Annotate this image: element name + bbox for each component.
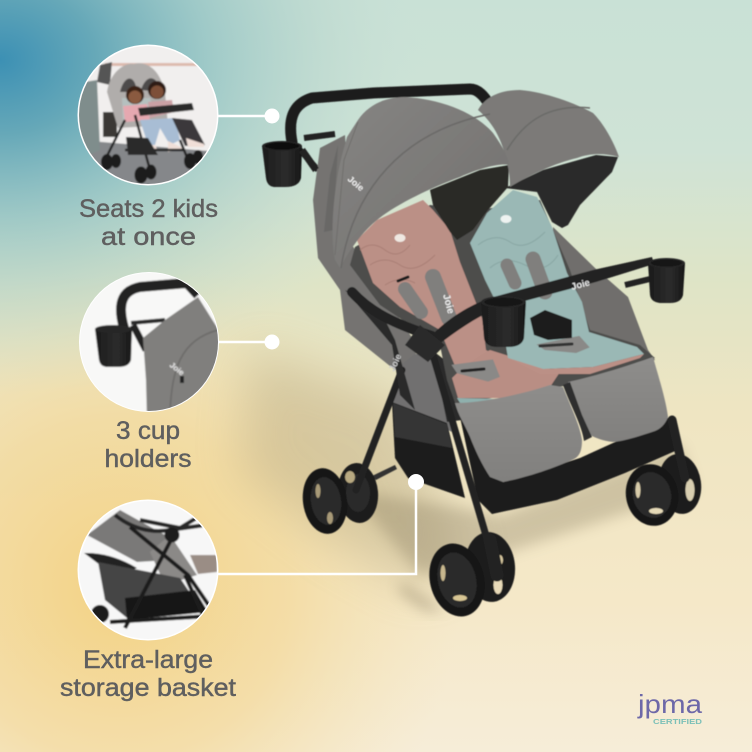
buckle <box>530 310 572 340</box>
label: 3 cup holders: holders <box>104 445 192 473</box>
frame legs <box>356 352 685 575</box>
inset: cup holder <box>78 272 225 420</box>
stroller <box>262 89 705 622</box>
inset: storage basket <box>78 499 220 641</box>
left cup holder <box>262 141 316 187</box>
push handle <box>291 89 489 142</box>
label: seats 2 kids at once: Seats 2 kids <box>79 195 218 223</box>
footrest platform <box>460 417 682 514</box>
front wheels <box>299 459 684 622</box>
foot covers <box>455 357 668 482</box>
jpma certified logo: jpma <box>637 689 703 719</box>
connector: basket <box>218 474 424 574</box>
connector: seats <box>218 108 280 124</box>
teal seat liner <box>470 190 644 374</box>
right seat side <box>550 227 655 372</box>
label: seats 2 kids at once: at once <box>101 223 196 251</box>
left body side panel <box>313 135 420 370</box>
right canopy <box>478 90 619 187</box>
floor shadow <box>240 350 695 612</box>
inset: cup holder: Joie <box>168 360 186 378</box>
seat logos <box>394 215 512 242</box>
label: 3 cup holders <box>104 417 192 473</box>
inset: seats two kids <box>78 44 220 190</box>
front cup holder <box>481 296 526 347</box>
pink seat liner <box>357 200 560 404</box>
jpma certified logo <box>637 689 703 726</box>
label: extra-large storage basket: storage basket <box>60 674 236 702</box>
strap logos: Joie <box>440 293 456 316</box>
storage basket <box>372 350 470 498</box>
stroller hoods <box>107 63 168 128</box>
label: 3 cup holders: 3 cup <box>116 417 180 445</box>
seat backing <box>350 200 655 417</box>
rear wheels <box>335 451 705 604</box>
kids <box>126 86 144 104</box>
tray logo: Joie <box>570 277 591 293</box>
harness straps <box>398 259 588 380</box>
canopy logo: Joie <box>346 174 366 193</box>
front tray bar <box>430 257 654 345</box>
right cup holder <box>648 258 685 303</box>
frame logo: Joie <box>387 352 403 373</box>
left canopy <box>333 97 509 268</box>
jpma certified logo: CERTIFIED <box>653 717 703 726</box>
frame and wheels <box>105 115 188 170</box>
connector: cup holders <box>218 334 280 350</box>
label: extra-large storage basket: Extra-large <box>83 646 213 674</box>
canopy interiors <box>430 155 618 240</box>
label: extra-large storage basket <box>60 646 236 702</box>
front frame arm <box>352 292 432 336</box>
label: seats 2 kids at once <box>79 195 218 251</box>
